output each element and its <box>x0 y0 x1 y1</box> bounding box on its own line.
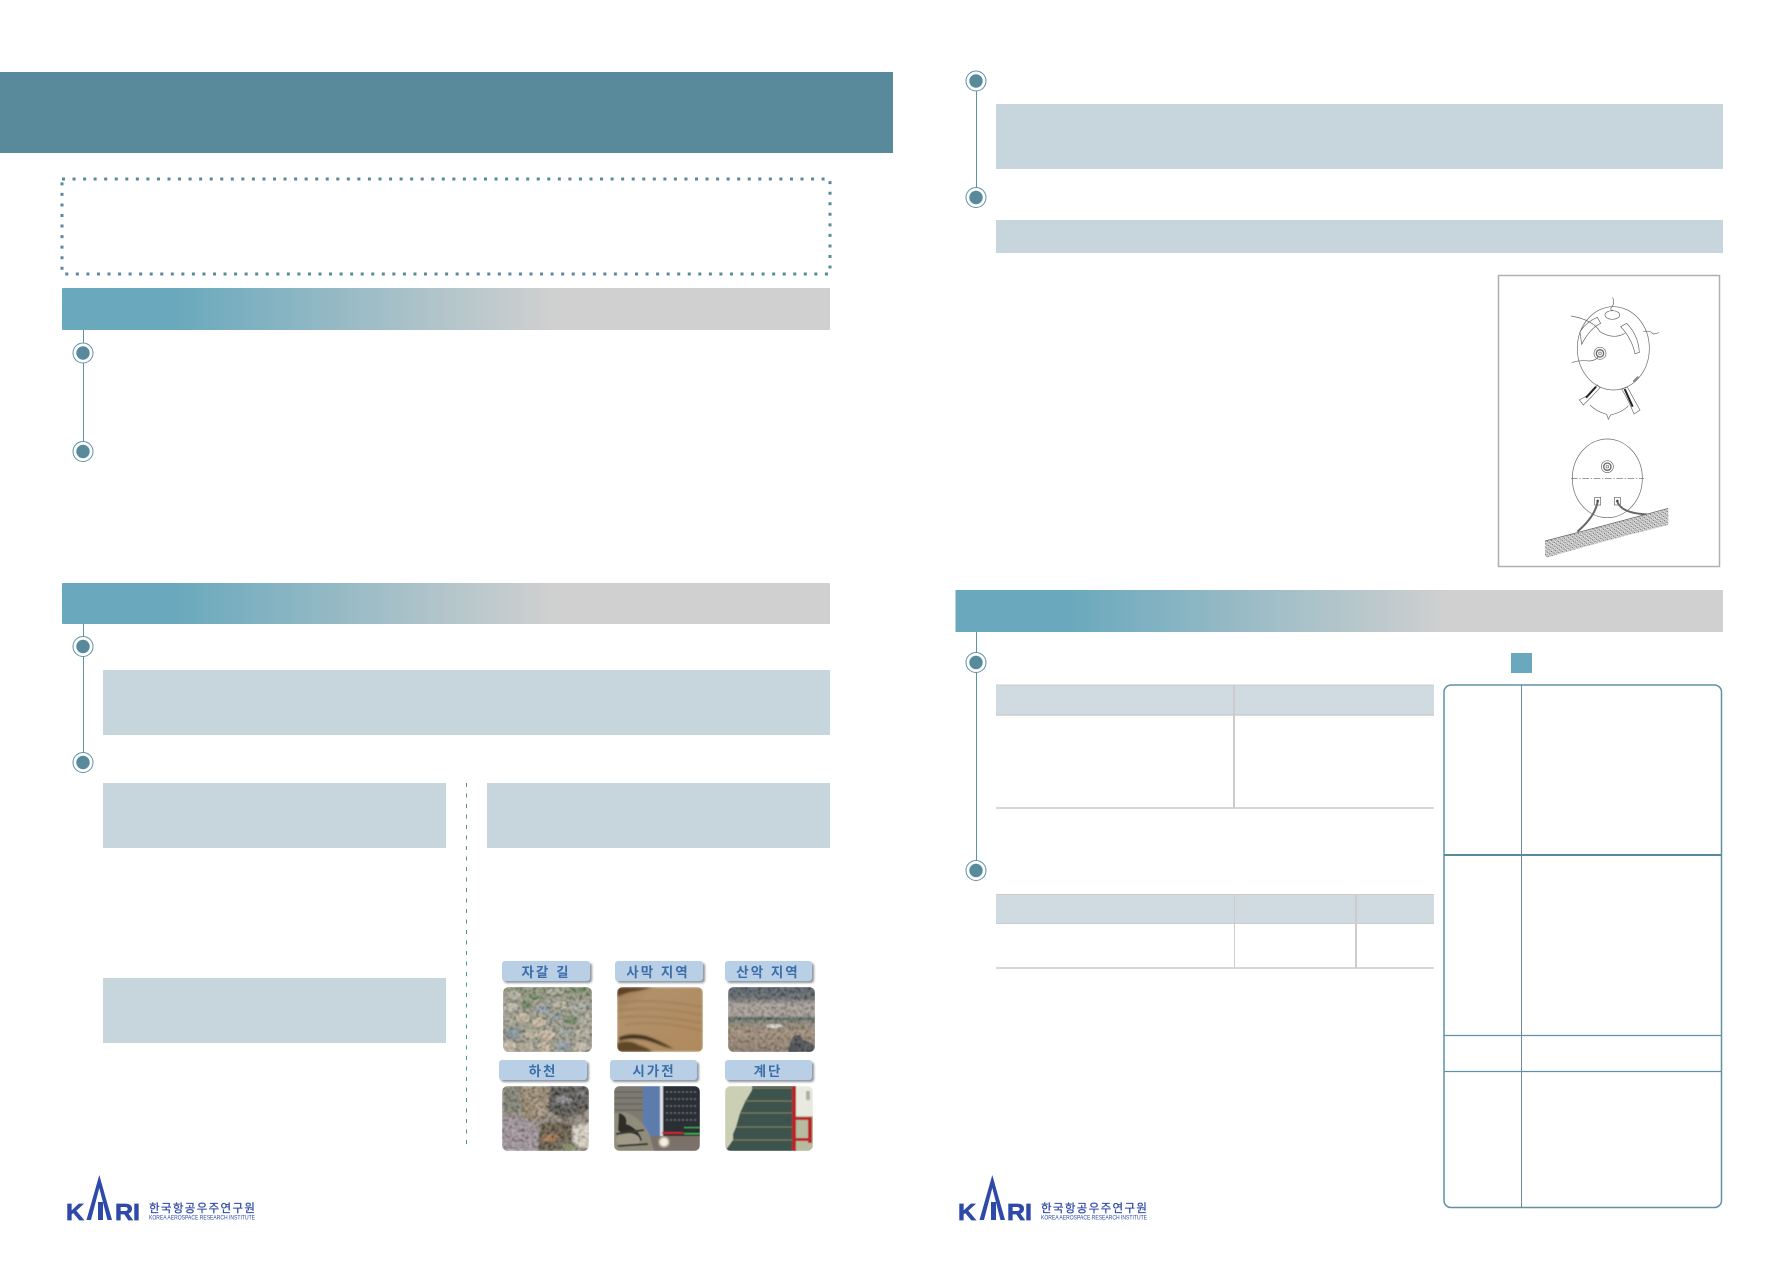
terrain label: mountain: 산악 지역 <box>736 965 800 980</box>
bullet 2 <box>73 442 93 462</box>
bullet 4 <box>73 752 93 772</box>
panel: right page shaded box 2 <box>996 220 1723 253</box>
figure: spherical device diagram <box>1498 276 1720 566</box>
bullet 6 <box>966 188 986 208</box>
bullet 7 <box>966 652 986 672</box>
terrain label: desert <box>615 961 705 983</box>
section heading bar 1 <box>62 288 830 330</box>
terrain label: river <box>499 1060 589 1082</box>
bullet 5 <box>966 71 986 91</box>
bullet 8 <box>966 860 986 880</box>
panel: right shaded box <box>487 783 830 848</box>
photo: mountain area <box>728 987 815 1052</box>
institute name right: 한국항공우주연구원 <box>1041 1201 1147 1215</box>
wordmark right <box>958 1175 1032 1225</box>
table 1 header <box>996 685 1434 715</box>
panel: right page shaded box 1 <box>996 104 1723 169</box>
institute name left <box>149 1201 255 1222</box>
timeline: section 3 <box>966 632 986 880</box>
wordmark left: K <box>66 1199 84 1225</box>
section heading bar 3 <box>956 590 1723 632</box>
panel: full width shaded box <box>103 670 830 735</box>
table 1 <box>996 685 1434 808</box>
terrain label: gravel road: 자갈 길 <box>521 965 571 980</box>
wordmark right: K <box>958 1199 976 1225</box>
terrain label: desert: 사막 지역 <box>626 965 690 980</box>
terrain label: river: 하천 <box>529 1064 557 1079</box>
upper device view <box>1571 297 1659 419</box>
timeline: right page top <box>966 71 986 208</box>
terrain label: mountain <box>725 961 814 983</box>
title banner <box>0 72 893 153</box>
terrain label: stairs: 계단 <box>754 1064 782 1079</box>
panel: left shaded box lower <box>103 978 446 1043</box>
photo: urban combat <box>614 1086 700 1151</box>
timeline: section 1 <box>73 330 93 462</box>
dotted intro box <box>62 179 830 274</box>
terrain label: gravel road <box>502 961 592 983</box>
photo: desert <box>617 987 703 1052</box>
photo: river <box>502 1086 589 1151</box>
table 2 <box>996 894 1434 968</box>
terrain label: urban combat <box>610 1060 699 1082</box>
device drawings <box>1545 297 1668 558</box>
institute name right <box>1041 1201 1147 1222</box>
figure frame <box>1498 276 1720 566</box>
terrain label: stairs <box>725 1060 814 1082</box>
timeline: section 2 <box>73 624 93 772</box>
panel: left shaded box upper <box>103 783 446 848</box>
bullet 3 <box>73 636 93 656</box>
teal marker square <box>1511 653 1532 673</box>
lower device view <box>1545 439 1668 558</box>
column divider <box>466 783 468 1150</box>
institute name left: 한국항공우주연구원 <box>149 1201 255 1215</box>
side table: rounded panel <box>1444 685 1722 1208</box>
wordmark right: RI <box>1007 1199 1032 1225</box>
table 2 header <box>996 894 1434 924</box>
wordmark left: RI <box>115 1199 140 1225</box>
bullet 1 <box>73 343 93 363</box>
institute name right: KOREA AEROSPACE RESEARCH INSTITUTE <box>1041 1216 1147 1222</box>
photo: stairs <box>725 1086 813 1151</box>
section heading bar 2 <box>62 583 830 624</box>
logo: KARI right <box>958 1175 1147 1225</box>
photo: gravel road <box>502 987 593 1052</box>
wordmark left <box>66 1175 140 1225</box>
terrain label: urban combat: 시가전 <box>632 1064 676 1079</box>
institute name left: KOREA AEROSPACE RESEARCH INSTITUTE <box>149 1216 255 1222</box>
logo: KARI left <box>66 1175 255 1225</box>
